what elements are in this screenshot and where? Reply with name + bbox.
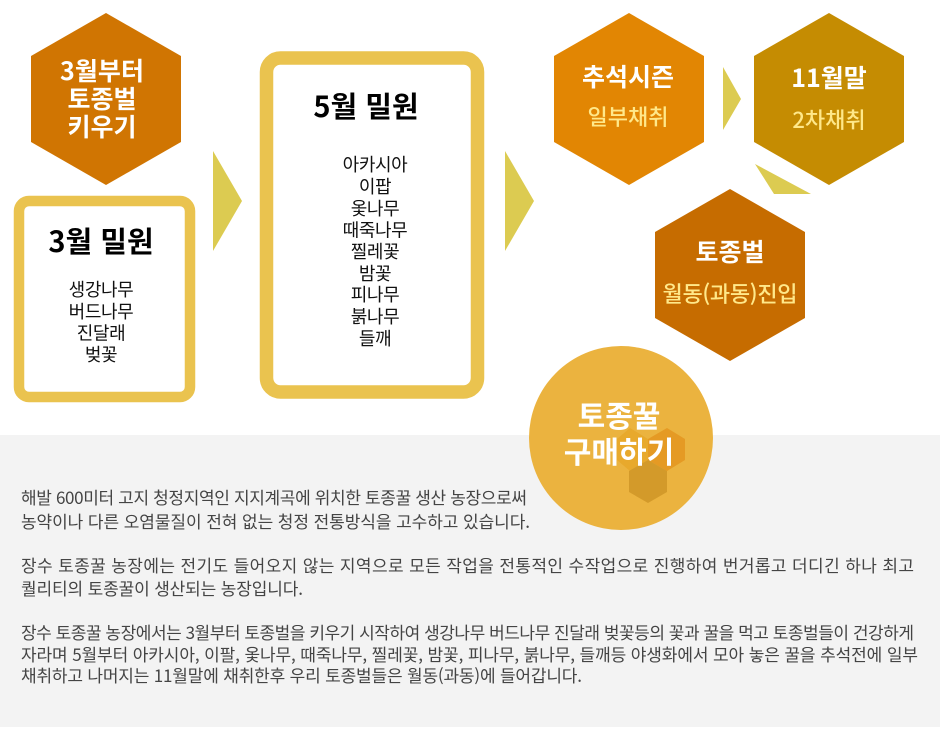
panel: May nectar sources: 아카시아 (343, 151, 408, 177)
hexagon: Chuseok partial harvest: 일부채취 (588, 100, 668, 132)
panel: May nectar sources: 옻나무 (351, 195, 399, 221)
panel: May nectar sources: 들깨 (359, 325, 391, 351)
panel: May nectar sources: 5월 밀원 (313, 84, 419, 126)
panel: March nectar sources: 벚꽃 (85, 341, 117, 367)
panel: March nectar sources: 진달래 (77, 320, 125, 346)
panel: May nectar sources: 밤꽃 (359, 260, 391, 286)
panel: May nectar sources: 때죽나무 (343, 216, 407, 242)
text block: yearly cycle: 자라며 5월부터 아카시아, 이팔, 옻나무, 때죽나무, 찔레꽃, 밤꽃, 피나무, 붉나무, 들깨등 야생화에서 모아 놓은 꿀을 추석전에 일부 (21, 641, 918, 666)
button: buy native honey (529, 346, 713, 530)
background panel (0, 435, 940, 727)
hexagon: second harvest in late November: 2차채취 (792, 103, 866, 135)
hexagon: raising bees from March: 3월부터 (60, 52, 144, 88)
text block: traditional manual work: 장수 토종꿀 농장에는 전기도 들어오지 않는 지역으로 모든 작업을 전통적인 수작업으로 진행하여 번거롭고 더디긴 하나 최고 (21, 552, 914, 577)
text block: yearly cycle (21, 619, 918, 687)
panel: May nectar sources: 이팝 (359, 173, 391, 199)
panel: May nectar sources: 피나무 (351, 281, 399, 307)
arrow: November to wintering (755, 164, 811, 194)
hexagon: Chuseok partial harvest (554, 13, 704, 185)
panel: May nectar sources: 찔레꽃 (351, 238, 399, 264)
text block: traditional manual work: 퀄리티의 토종꿀이 생산되는 농장입니다. (21, 575, 303, 600)
hexagon: second harvest in late November (754, 13, 904, 185)
text block: farm location: 농약이나 다른 오염물질이 전혀 없는 청정 전통방식을 고수하고 있습니다. (21, 508, 530, 533)
panel: March nectar sources: 3월 밀원 (48, 219, 154, 261)
arrow: May to harvest (505, 151, 534, 251)
panel: May nectar sources (266, 58, 478, 392)
button: buy native honey: 구매하기 (564, 428, 674, 472)
panel: March nectar sources: 버드나무 (69, 298, 133, 324)
text block: yearly cycle: 채취하고 나머지는 11월말에 채취한후 우리 토종벌들은 월동(과동)에 들어갑니다. (21, 662, 582, 687)
hexagon: bees enter wintering (655, 189, 805, 361)
panel: May nectar sources: 붉나무 (351, 303, 399, 329)
hexagon: second harvest in late November: 11월말 (791, 59, 867, 95)
hexagon: Chuseok partial harvest: 추석시즌 (582, 58, 674, 94)
panel: March nectar sources (19, 201, 190, 397)
text block: farm location: 해발 600미터 고지 청정지역인 지지계곡에 위치한 토종꿀 생산 농장으로써 (21, 484, 527, 509)
panel: March nectar sources: 생강나무 (69, 276, 133, 302)
text block: farm location (21, 484, 530, 533)
hexagon: raising bees from March: 토종벌 (67, 80, 137, 116)
text block: yearly cycle: 장수 토종꿀 농장에서는 3월부터 토종벌을 키우기 시작하여 생강나무 버드나무 진달래 벚꽃등의 꽃과 꿀을 먹고 토종벌들이 건강하게 (21, 619, 914, 644)
hexagon: bees enter wintering: 월동(과동)진입 (662, 277, 798, 309)
arrow: March to May (213, 151, 242, 251)
text block: traditional manual work (21, 552, 914, 600)
hexagon: raising bees from March (31, 13, 181, 185)
arrow: Chuseok to November (723, 67, 741, 130)
button: buy native honey: 토종꿀 (578, 392, 660, 436)
hexagon: bees enter wintering: 토종벌 (695, 233, 765, 269)
hexagon: raising bees from March: 키우기 (67, 108, 137, 144)
